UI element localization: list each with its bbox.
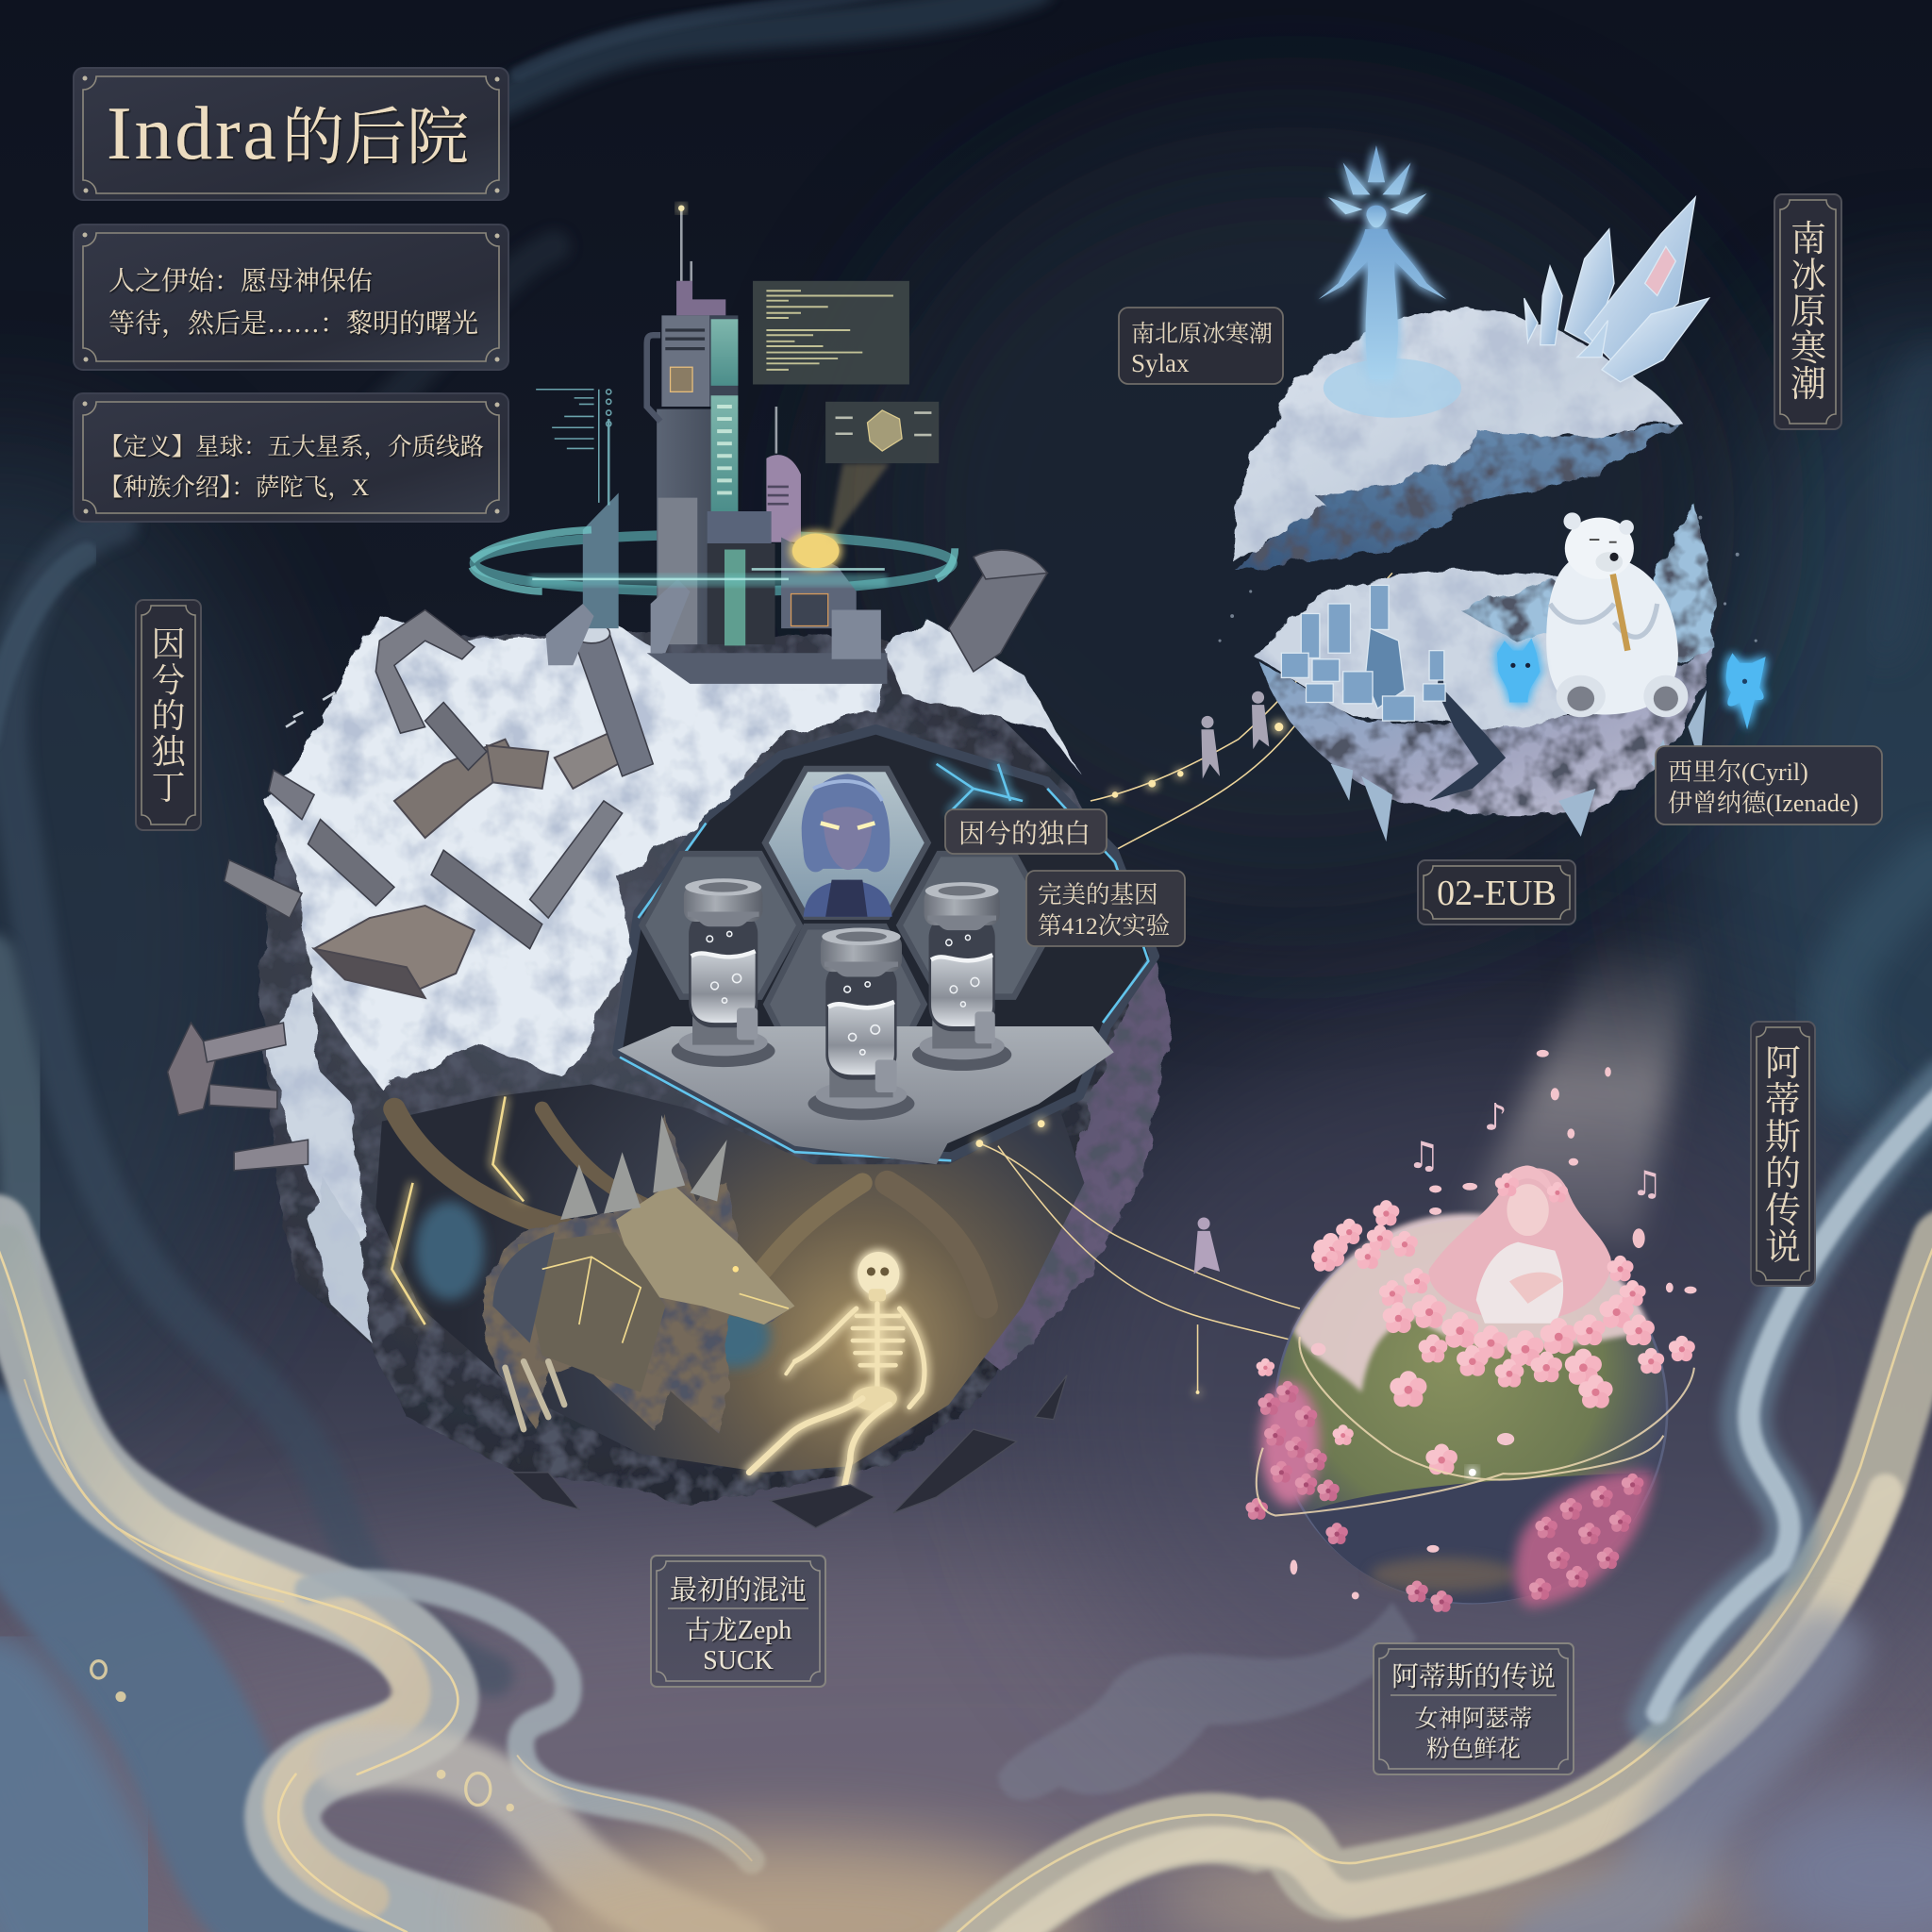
blue spirit floating (1726, 653, 1766, 729)
hologram screen: left readout (536, 390, 611, 506)
ropes to pink planet (975, 1120, 1300, 1394)
goddess ice pool (1324, 358, 1461, 418)
vertical label: ice: 冰 (1790, 257, 1826, 296)
hologram screen: text panel (753, 281, 909, 385)
lab hexagon wall (641, 769, 1054, 1082)
music notes: ♫ (1631, 1163, 1662, 1204)
tower city (472, 205, 955, 684)
title text: Indra (107, 92, 279, 175)
label: Sylax: Sylax (1131, 349, 1190, 377)
snow cap (264, 616, 1079, 1343)
label: chaos (651, 1556, 825, 1687)
purple rim (974, 862, 1171, 1374)
hologram screen: radar chart (825, 402, 939, 463)
intro text: 等待，然后是……：黎明的曙光 (108, 308, 478, 339)
smoke: bottom glow (492, 1787, 1932, 1932)
brown landmass (1370, 1557, 1518, 1592)
petals (1291, 1050, 1697, 1599)
base platform (647, 653, 887, 684)
label: Atis legend: 阿蒂斯的传说 (1391, 1661, 1556, 1692)
smoke: top wisps (308, 0, 1035, 468)
definition text: 【种族介绍】：萨陀飞，X (99, 474, 369, 501)
pink goddess (1429, 1166, 1611, 1324)
vertical label: pink: 的 (1765, 1155, 1801, 1194)
ice crystals (1524, 197, 1709, 382)
lower half bowl (1257, 643, 1714, 816)
antenna (681, 209, 776, 454)
central tower (657, 409, 738, 644)
label: chaos: 最初的混沌 (670, 1574, 807, 1606)
flower wreath (1311, 1200, 1695, 1474)
dome (781, 537, 857, 628)
ice city (1281, 585, 1445, 721)
lab bay (617, 729, 1155, 1157)
dark fissure (1429, 658, 1506, 801)
portrait: woman in hexagon (802, 774, 892, 917)
label: monologue: 因兮的独白 (958, 819, 1091, 849)
lower half snow disc (1253, 570, 1714, 727)
music notes (1407, 1097, 1662, 1204)
lab tanks (672, 878, 1011, 1120)
vertical label: pink (1751, 1022, 1815, 1286)
light beam (1466, 937, 1700, 1244)
dragon spikes (560, 1115, 727, 1220)
vertical label: left: 的 (151, 697, 186, 735)
label: perfect genes: 第412次实验 (1038, 912, 1170, 940)
ice goddess (1319, 145, 1446, 379)
pink planet (1245, 937, 1700, 1612)
vertical label: ice: 寒 (1790, 329, 1826, 369)
label: Cyril and Izenade: 西里尔(Cyril) (1668, 758, 1808, 786)
label: monologue (945, 809, 1107, 854)
globe (1275, 1219, 1667, 1603)
dark ocean lower (1306, 1473, 1651, 1603)
vertical label: left (136, 600, 201, 830)
pale pink land (1293, 1214, 1651, 1392)
flower cluster left (1245, 1358, 1354, 1544)
label: Sylax: 南北原冰寒潮 (1131, 321, 1273, 347)
ice planet (1218, 145, 1766, 841)
music notes: ♪ (1484, 1097, 1507, 1140)
title panel (74, 68, 508, 200)
skeleton (749, 1252, 924, 1506)
loose rock shards (511, 1375, 1067, 1528)
ice mountain (1460, 506, 1714, 672)
label: Cyril and Izenade (1656, 746, 1882, 824)
side tower (766, 455, 801, 542)
vertical label: left: 丁 (151, 769, 186, 807)
label: Atis legend: 女神阿瑟蒂 (1414, 1706, 1533, 1732)
label: Atis legend: 粉色鲜花 (1426, 1736, 1521, 1762)
rope walkers (1194, 691, 1269, 1274)
smoke: left cream swirl (0, 1232, 752, 1932)
definition text: 【定义】星球：五大星系，介质线路 (99, 433, 484, 460)
connecting ropes to ice planet (1091, 573, 1420, 850)
music notes: ♫ (1407, 1135, 1441, 1177)
rock sphere (258, 628, 1168, 1506)
label: perfect genes (1026, 871, 1185, 946)
ruined columns (168, 550, 1047, 1171)
lower cave (375, 1084, 1084, 1473)
mid block (708, 511, 772, 543)
top half dome (1236, 308, 1681, 564)
smoke: centre wisp (998, 1602, 1417, 1800)
main planet (168, 205, 1300, 1528)
smoke: bubbles (92, 1661, 512, 1810)
vertical label: pink: 说 (1765, 1228, 1801, 1268)
rubble (314, 727, 641, 998)
vertical label: pink: 斯 (1765, 1118, 1801, 1158)
flower cluster bottom right (1406, 1472, 1654, 1612)
blue spirit near bear (1497, 639, 1541, 702)
ice particles (1218, 516, 1757, 642)
icicles (1331, 690, 1707, 841)
vertical label: left: 兮 (151, 661, 186, 699)
vertical label: ice: 南 (1790, 220, 1826, 259)
left fin (583, 492, 619, 628)
vertical label: ice (1774, 194, 1841, 429)
front hologram ring (472, 530, 955, 591)
lab floor (617, 1026, 1114, 1164)
title text: 的后院 (282, 104, 469, 173)
vertical label: pink: 阿 (1765, 1044, 1801, 1084)
smoke: left wisps (0, 524, 492, 1675)
label: 02-EUB: 02-EUB (1437, 874, 1557, 913)
label: Atis legend (1374, 1643, 1574, 1774)
cave blue pools (415, 1201, 770, 1368)
polar bear (1546, 512, 1688, 717)
vertical label: ice: 原 (1790, 292, 1826, 332)
label: perfect genes: 完美的基因 (1038, 881, 1158, 908)
top half underside (1236, 422, 1681, 572)
vertical label: ice: 潮 (1790, 365, 1826, 405)
dragon (483, 1115, 794, 1436)
birds (286, 692, 335, 727)
vertical label: pink: 蒂 (1765, 1081, 1801, 1121)
vertical label: left: 独 (151, 733, 187, 771)
intro panel (74, 225, 508, 370)
lab blue circuit lines (620, 764, 1148, 1160)
label: chaos: 古龙Zeph (685, 1615, 791, 1645)
label: Cyril and Izenade: 伊曾纳德(Izenade) (1668, 790, 1858, 817)
hologram back ring (475, 535, 953, 591)
cave roots (394, 1109, 986, 1306)
intro text: 人之伊始：愿母神保佑 (108, 266, 373, 296)
smoke: right cream swirl (949, 370, 1932, 1932)
label: chaos: SUCK (703, 1646, 774, 1675)
lightning cracks (391, 1096, 524, 1324)
definition panel (74, 393, 508, 522)
golden orbit rings (1257, 1337, 1694, 1516)
label: Sylax (1119, 308, 1283, 384)
label: 02-EUB (1418, 860, 1575, 924)
vertical label: pink: 传 (1765, 1191, 1801, 1231)
vertical label: left: 因 (151, 625, 186, 663)
